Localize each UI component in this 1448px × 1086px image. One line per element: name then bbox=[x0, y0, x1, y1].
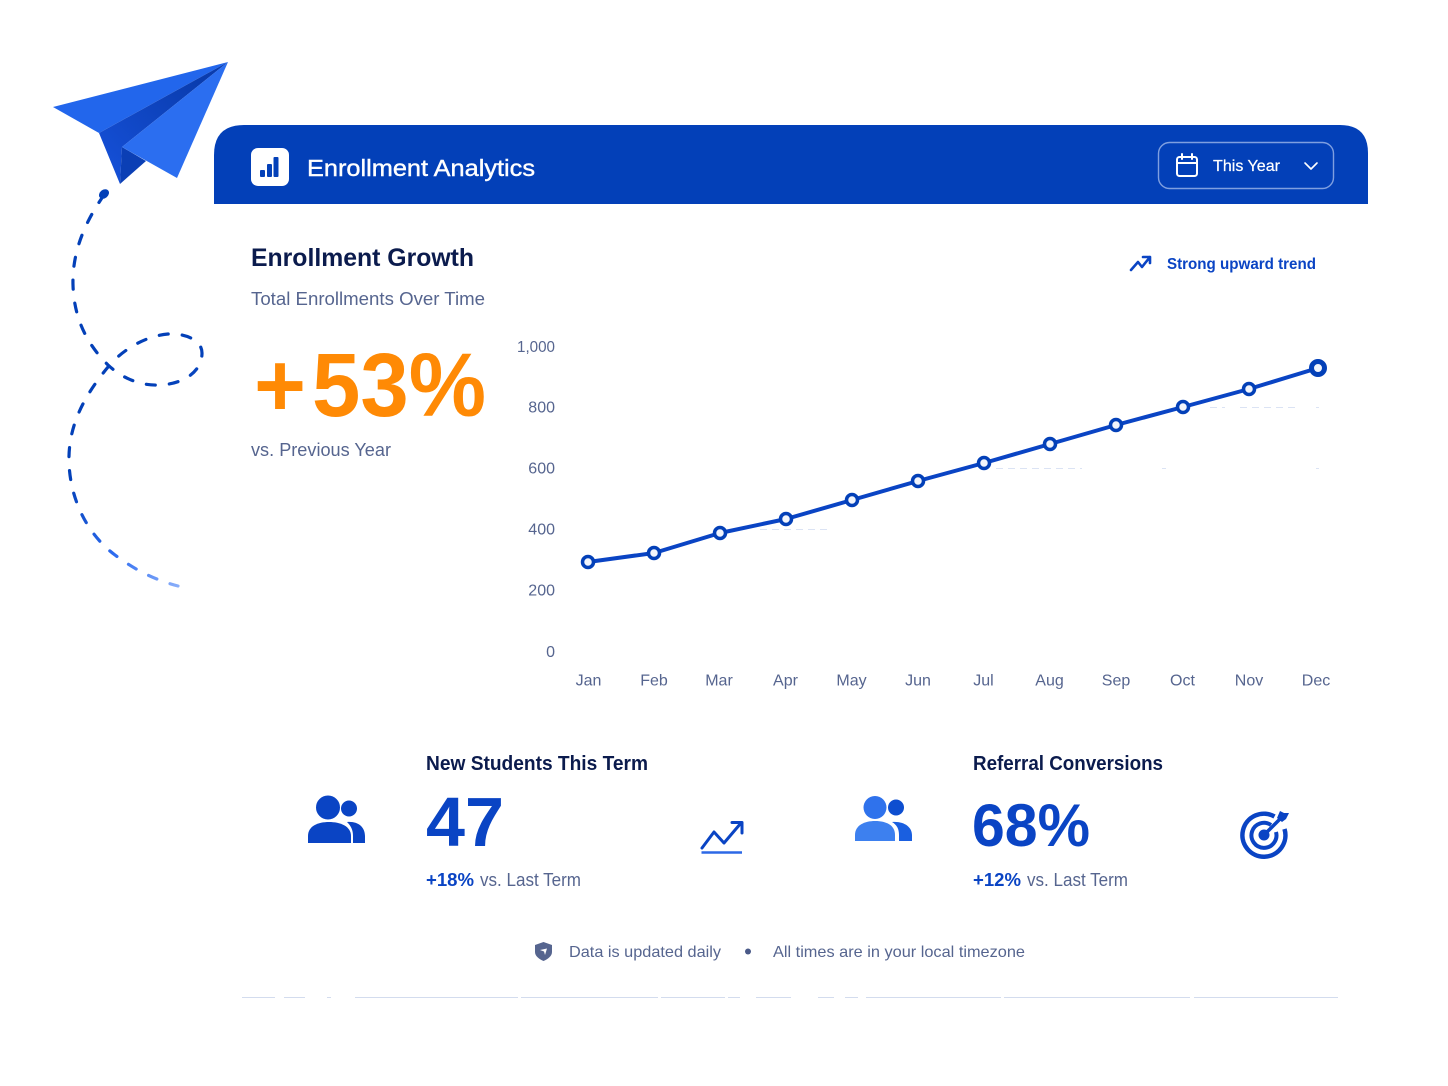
stat value: 47 bbox=[426, 783, 504, 861]
data line bbox=[588, 368, 1318, 562]
x axis labels: Nov bbox=[1235, 672, 1263, 690]
date selector: This Year bbox=[1213, 158, 1281, 175]
icon: trend arrow bbox=[1131, 257, 1150, 270]
big stat: 53% bbox=[312, 336, 486, 436]
x axis labels: May bbox=[836, 672, 867, 690]
y axis labels: 600 bbox=[528, 460, 555, 478]
x axis labels: Oct bbox=[1170, 672, 1196, 690]
icon: people light bbox=[855, 796, 912, 841]
x axis labels: Jan bbox=[576, 672, 601, 690]
stat: referral conversions bbox=[855, 753, 1289, 890]
y axis labels: 800 bbox=[528, 400, 555, 416]
x axis labels: Mar bbox=[705, 672, 733, 690]
faint chart residue bbox=[760, 408, 1319, 530]
y axis labels: 1,000 bbox=[517, 339, 555, 356]
stat change bbox=[973, 870, 1128, 890]
icon: target bbox=[1242, 811, 1289, 857]
stat: new students bbox=[308, 753, 742, 890]
stat value: 68% bbox=[972, 792, 1090, 859]
y axis labels: 0 bbox=[546, 644, 555, 661]
header title: Enrollment Analytics bbox=[307, 155, 535, 181]
dashed flight trail bbox=[69, 187, 202, 586]
stat change: +12% bbox=[973, 870, 1021, 890]
stat heading: New Students This Term bbox=[426, 753, 648, 775]
footer rule bbox=[242, 996, 1338, 998]
stat change: vs. Last Term bbox=[1027, 870, 1128, 890]
icon: calendar bbox=[1177, 154, 1197, 176]
stat change bbox=[426, 870, 581, 890]
icon: people bbox=[308, 795, 365, 843]
x axis labels: Jun bbox=[905, 672, 931, 690]
date selector bbox=[1158, 142, 1334, 188]
header bar bbox=[214, 125, 1368, 204]
icon: shield bbox=[535, 942, 552, 961]
y axis labels: 400 bbox=[528, 522, 555, 538]
section heading: Enrollment Growth bbox=[251, 244, 474, 272]
x axis labels: Dec bbox=[1302, 672, 1330, 690]
icon: paper airplane bbox=[53, 62, 228, 184]
x axis labels: Jul bbox=[973, 672, 994, 690]
stat change: +18% bbox=[426, 870, 474, 890]
footer note: All times are in your local timezone bbox=[773, 944, 1025, 961]
stat change: vs. Last Term bbox=[480, 870, 581, 890]
footer note: Data is updated daily bbox=[569, 944, 721, 961]
x axis labels: Feb bbox=[640, 672, 668, 690]
big stat: + bbox=[254, 336, 306, 436]
y axis labels bbox=[517, 339, 555, 661]
section subtitle: Total Enrollments Over Time bbox=[251, 289, 485, 309]
x axis labels: Aug bbox=[1035, 672, 1064, 690]
icon: bar chart logo bbox=[251, 148, 289, 186]
y axis labels: 200 bbox=[528, 582, 555, 600]
x axis labels bbox=[576, 672, 1330, 690]
icon: chevron bbox=[1305, 163, 1317, 169]
x axis labels: Sep bbox=[1102, 672, 1130, 690]
trend callout: Strong upward trend bbox=[1167, 256, 1316, 273]
icon: growth chart bbox=[702, 822, 742, 852]
data points bbox=[582, 362, 1324, 568]
x axis labels: Apr bbox=[773, 672, 799, 690]
stat heading: Referral Conversions bbox=[973, 753, 1163, 775]
big stat caption: vs. Previous Year bbox=[251, 440, 391, 460]
line chart bbox=[517, 339, 1330, 690]
footer note bbox=[535, 942, 1025, 961]
